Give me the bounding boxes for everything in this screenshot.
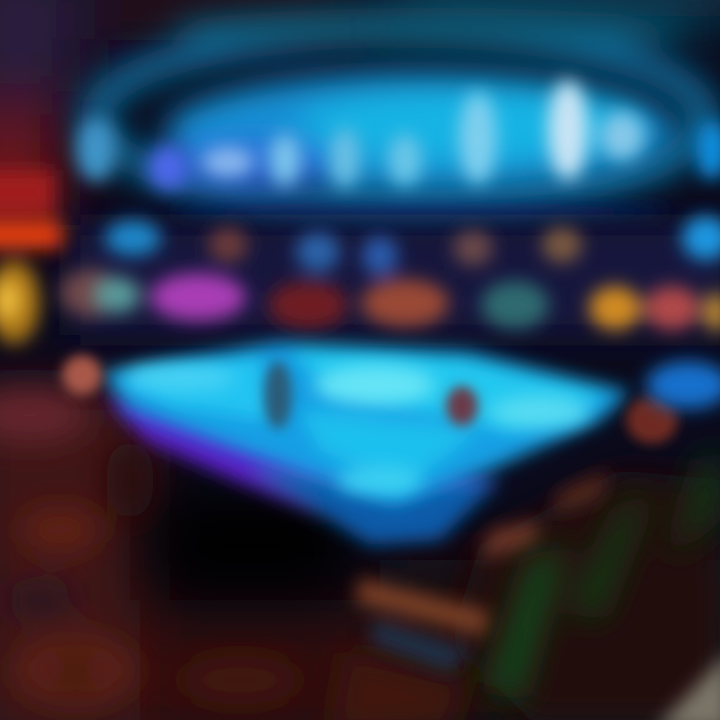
floor carpet pattern	[0, 389, 300, 704]
right blue table	[646, 361, 720, 409]
ceiling bright inner panel	[165, 72, 675, 192]
figures on the table	[62, 355, 678, 444]
furniture blocks	[355, 470, 610, 672]
amber lamp	[0, 280, 20, 320]
dark area below table	[150, 490, 350, 600]
table highlights	[125, 365, 590, 494]
ceiling oval ring	[95, 8, 705, 204]
ceiling light streaks	[148, 80, 720, 190]
middle band of coloured machines	[70, 225, 720, 335]
lower right green plants	[488, 450, 720, 700]
table glow edge	[105, 395, 500, 545]
lower right furniture	[330, 470, 720, 720]
left red and amber lights	[0, 170, 62, 344]
pool table surface	[100, 342, 630, 505]
bottom right grey floor	[655, 650, 720, 720]
